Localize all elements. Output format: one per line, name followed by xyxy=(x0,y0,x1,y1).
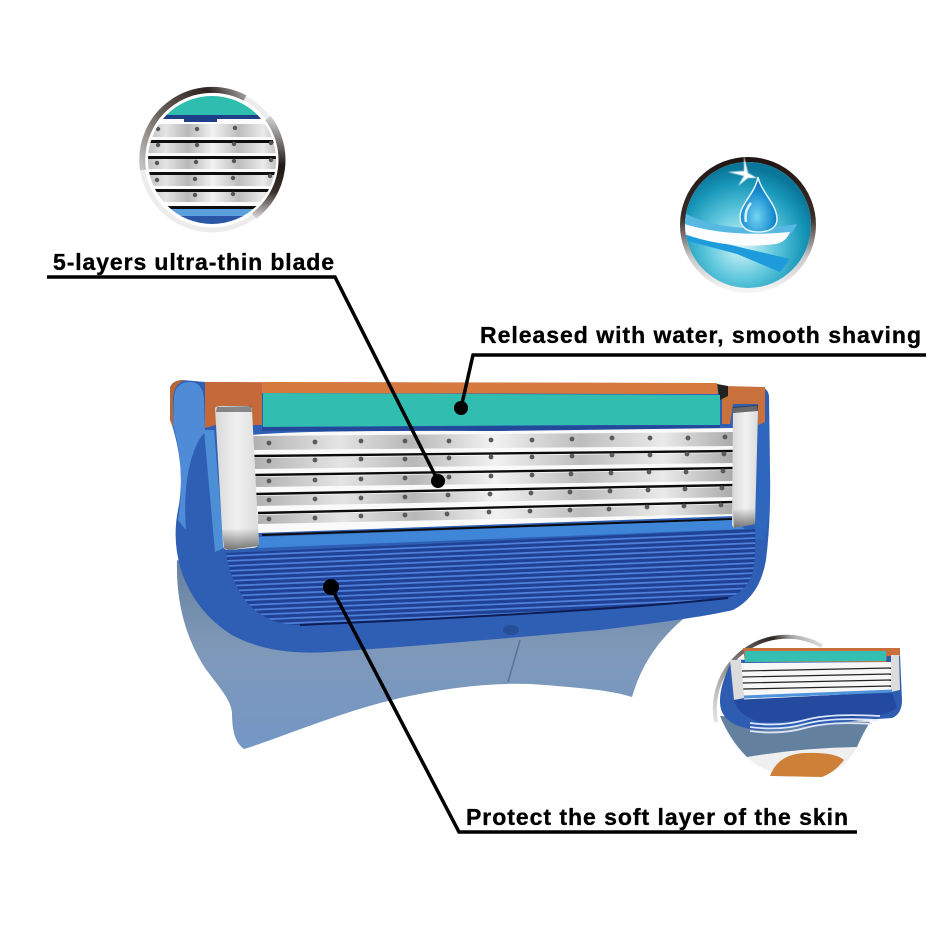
thumbnail content xyxy=(148,96,276,224)
callout: protect the skin: Protect the soft layer of the skin xyxy=(466,804,848,830)
small cartridge body xyxy=(720,655,902,730)
blue comb guard xyxy=(226,529,756,626)
orange thumb pad xyxy=(770,753,844,777)
wave lines xyxy=(750,715,880,732)
circular thumbnail: blades close-up xyxy=(140,90,285,235)
callout: 5-layers ultra-thin blade xyxy=(47,249,445,488)
right clip xyxy=(732,406,758,528)
callout: released with water: Released with water, smooth shaving xyxy=(480,322,921,348)
cartridge illustration xyxy=(170,380,770,749)
thumbnail ring xyxy=(142,90,282,230)
upper light strip xyxy=(685,214,797,236)
sparkle xyxy=(728,156,757,186)
teal lubricating strip xyxy=(263,393,720,427)
water drop xyxy=(740,177,777,232)
callout: 5-layers ultra-thin blade: 5-layers ultra-thin blade xyxy=(53,249,334,275)
callout: protect the skin xyxy=(323,579,857,832)
five blades xyxy=(252,428,735,535)
lower handle xyxy=(722,718,870,777)
callout: released with water xyxy=(454,322,926,415)
grey lower housing xyxy=(177,560,692,749)
thumbnail ring xyxy=(715,637,822,722)
lower blue strip xyxy=(684,234,790,272)
circular icon: water drop xyxy=(682,156,814,290)
orange top strip xyxy=(205,382,718,428)
blue body xyxy=(170,380,770,653)
light blue guard strip xyxy=(258,520,745,548)
left clip xyxy=(215,406,259,550)
circular thumbnail: cartridge with waves xyxy=(715,637,902,777)
white strip xyxy=(684,224,790,246)
